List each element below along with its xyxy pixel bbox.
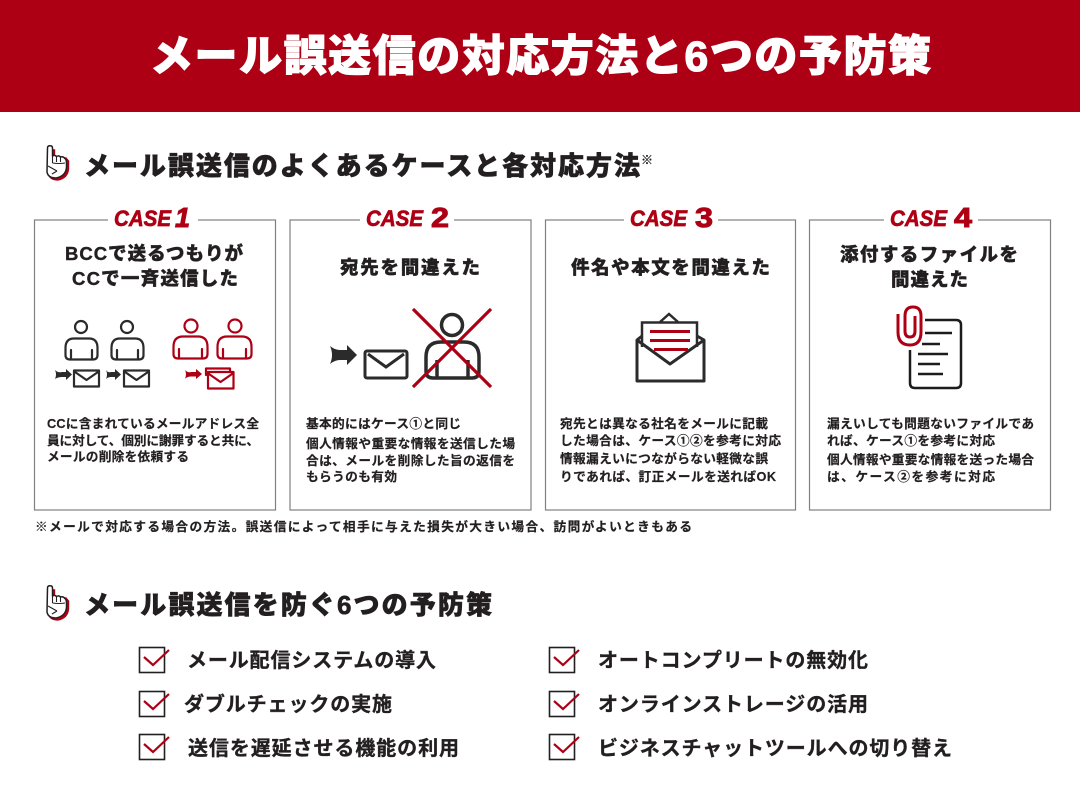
case 4 label: CASE xyxy=(890,206,948,231)
case 4 heading: 添付するファイルを xyxy=(840,244,1018,265)
prevention list: right column xyxy=(550,648,952,760)
icon: black recipients xyxy=(55,321,149,386)
icon: red recipients xyxy=(174,320,252,388)
case 3 label xyxy=(624,202,718,233)
item 4: オートコンプリートの無効化 xyxy=(598,649,868,672)
case 4 text: 個人情報や重要な情報を送った場合 xyxy=(827,452,1034,467)
item 2: ダブルチェックの実施 xyxy=(184,692,392,716)
case 4 label: 4 xyxy=(954,202,972,233)
case 2 label xyxy=(360,202,454,233)
case 2 label: 2 xyxy=(431,202,449,233)
case 3 text: りであれば、訂正メールを送ればOK xyxy=(560,469,777,484)
case 4 text xyxy=(827,416,1034,484)
case 1 text xyxy=(47,416,259,464)
icon: pointing hand xyxy=(47,146,68,180)
case 4 heading: 間違えた xyxy=(891,269,968,290)
case 1 heading: CCで一斉送信した xyxy=(72,268,238,289)
title banner: メール誤送信の対応方法と6つの予防策 xyxy=(150,33,931,81)
prevention list: left column xyxy=(140,648,459,760)
case 4 text: 漏えいしても問題ないファイルであ xyxy=(827,416,1034,431)
section heading: prevention: メール誤送信を防ぐ6つの予防策 xyxy=(84,590,492,620)
case 3 text: 宛先とは異なる社名をメールに記載 xyxy=(560,416,768,431)
case 4 label xyxy=(884,202,978,233)
panel: case 2 xyxy=(290,202,531,510)
case 2 text: 個人情報や重要な情報を送信した場 xyxy=(306,436,515,451)
case 1 heading: BCCで送るつもりが xyxy=(65,243,243,264)
case 3 label: CASE xyxy=(630,206,688,231)
icon: open envelope xyxy=(637,314,704,381)
case 2 text: もらうのも有効 xyxy=(306,469,397,484)
icon: attached document xyxy=(898,307,961,388)
case 2 text: 合は、メールを削除した旨の返信を xyxy=(306,453,515,468)
item 6: ビジネスチャットツールへの切り替え xyxy=(598,737,952,760)
case 2 label: CASE xyxy=(366,206,424,231)
item 5: オンラインストレージの活用 xyxy=(598,693,868,716)
case 1 label: CASE xyxy=(114,206,172,231)
case 3 text xyxy=(560,416,781,484)
case 4 text: は、ケース②を参考に対応 xyxy=(827,469,995,484)
case 3 label: 3 xyxy=(695,202,713,233)
icon: pointing hand xyxy=(47,586,68,620)
case 2 text xyxy=(306,416,515,484)
case 1 text: CCに含まれているメールアドレス全 xyxy=(47,416,259,431)
case 1 text: メールの削除を依頼する xyxy=(47,449,189,464)
case 1 label: 1 xyxy=(175,202,190,233)
case 1 text: 員に対して、個別に謝罪すると共に、 xyxy=(47,433,259,448)
case 3 text: した場合は、ケース①②を参考に対応 xyxy=(560,433,781,448)
panel: case 3 xyxy=(546,202,796,510)
case 4 heading xyxy=(840,244,1018,290)
footnote: ※メールで対応する場合の方法。誤送信によって相手に与えた損失が大きい場合、訪問がよいときもある xyxy=(35,519,692,534)
section heading: common cases: ※ xyxy=(641,153,653,167)
case 2 text: 基本的にはケース①と同じ xyxy=(306,416,461,431)
panel: case 1 xyxy=(34,202,276,510)
case 4 text: れば、ケース①を参考に対応 xyxy=(827,433,995,448)
case 1 heading xyxy=(65,243,243,289)
case 3 heading: 件名や本文を間違えた xyxy=(571,257,770,278)
case 2 heading: 宛先を間違えた xyxy=(340,257,480,278)
item 3: 送信を遅延させる機能の利用 xyxy=(188,737,459,760)
case 1 label xyxy=(108,202,198,233)
icon: wrong recipient xyxy=(330,309,491,387)
panel: case 4 xyxy=(810,202,1050,510)
case 3 text: 情報漏えいにつながらない軽微な誤 xyxy=(560,451,768,466)
item 1: メール配信システムの導入 xyxy=(187,648,436,672)
title banner xyxy=(0,0,1080,112)
section heading: common cases: メール誤送信のよくあるケースと各対応方法 xyxy=(84,151,640,181)
